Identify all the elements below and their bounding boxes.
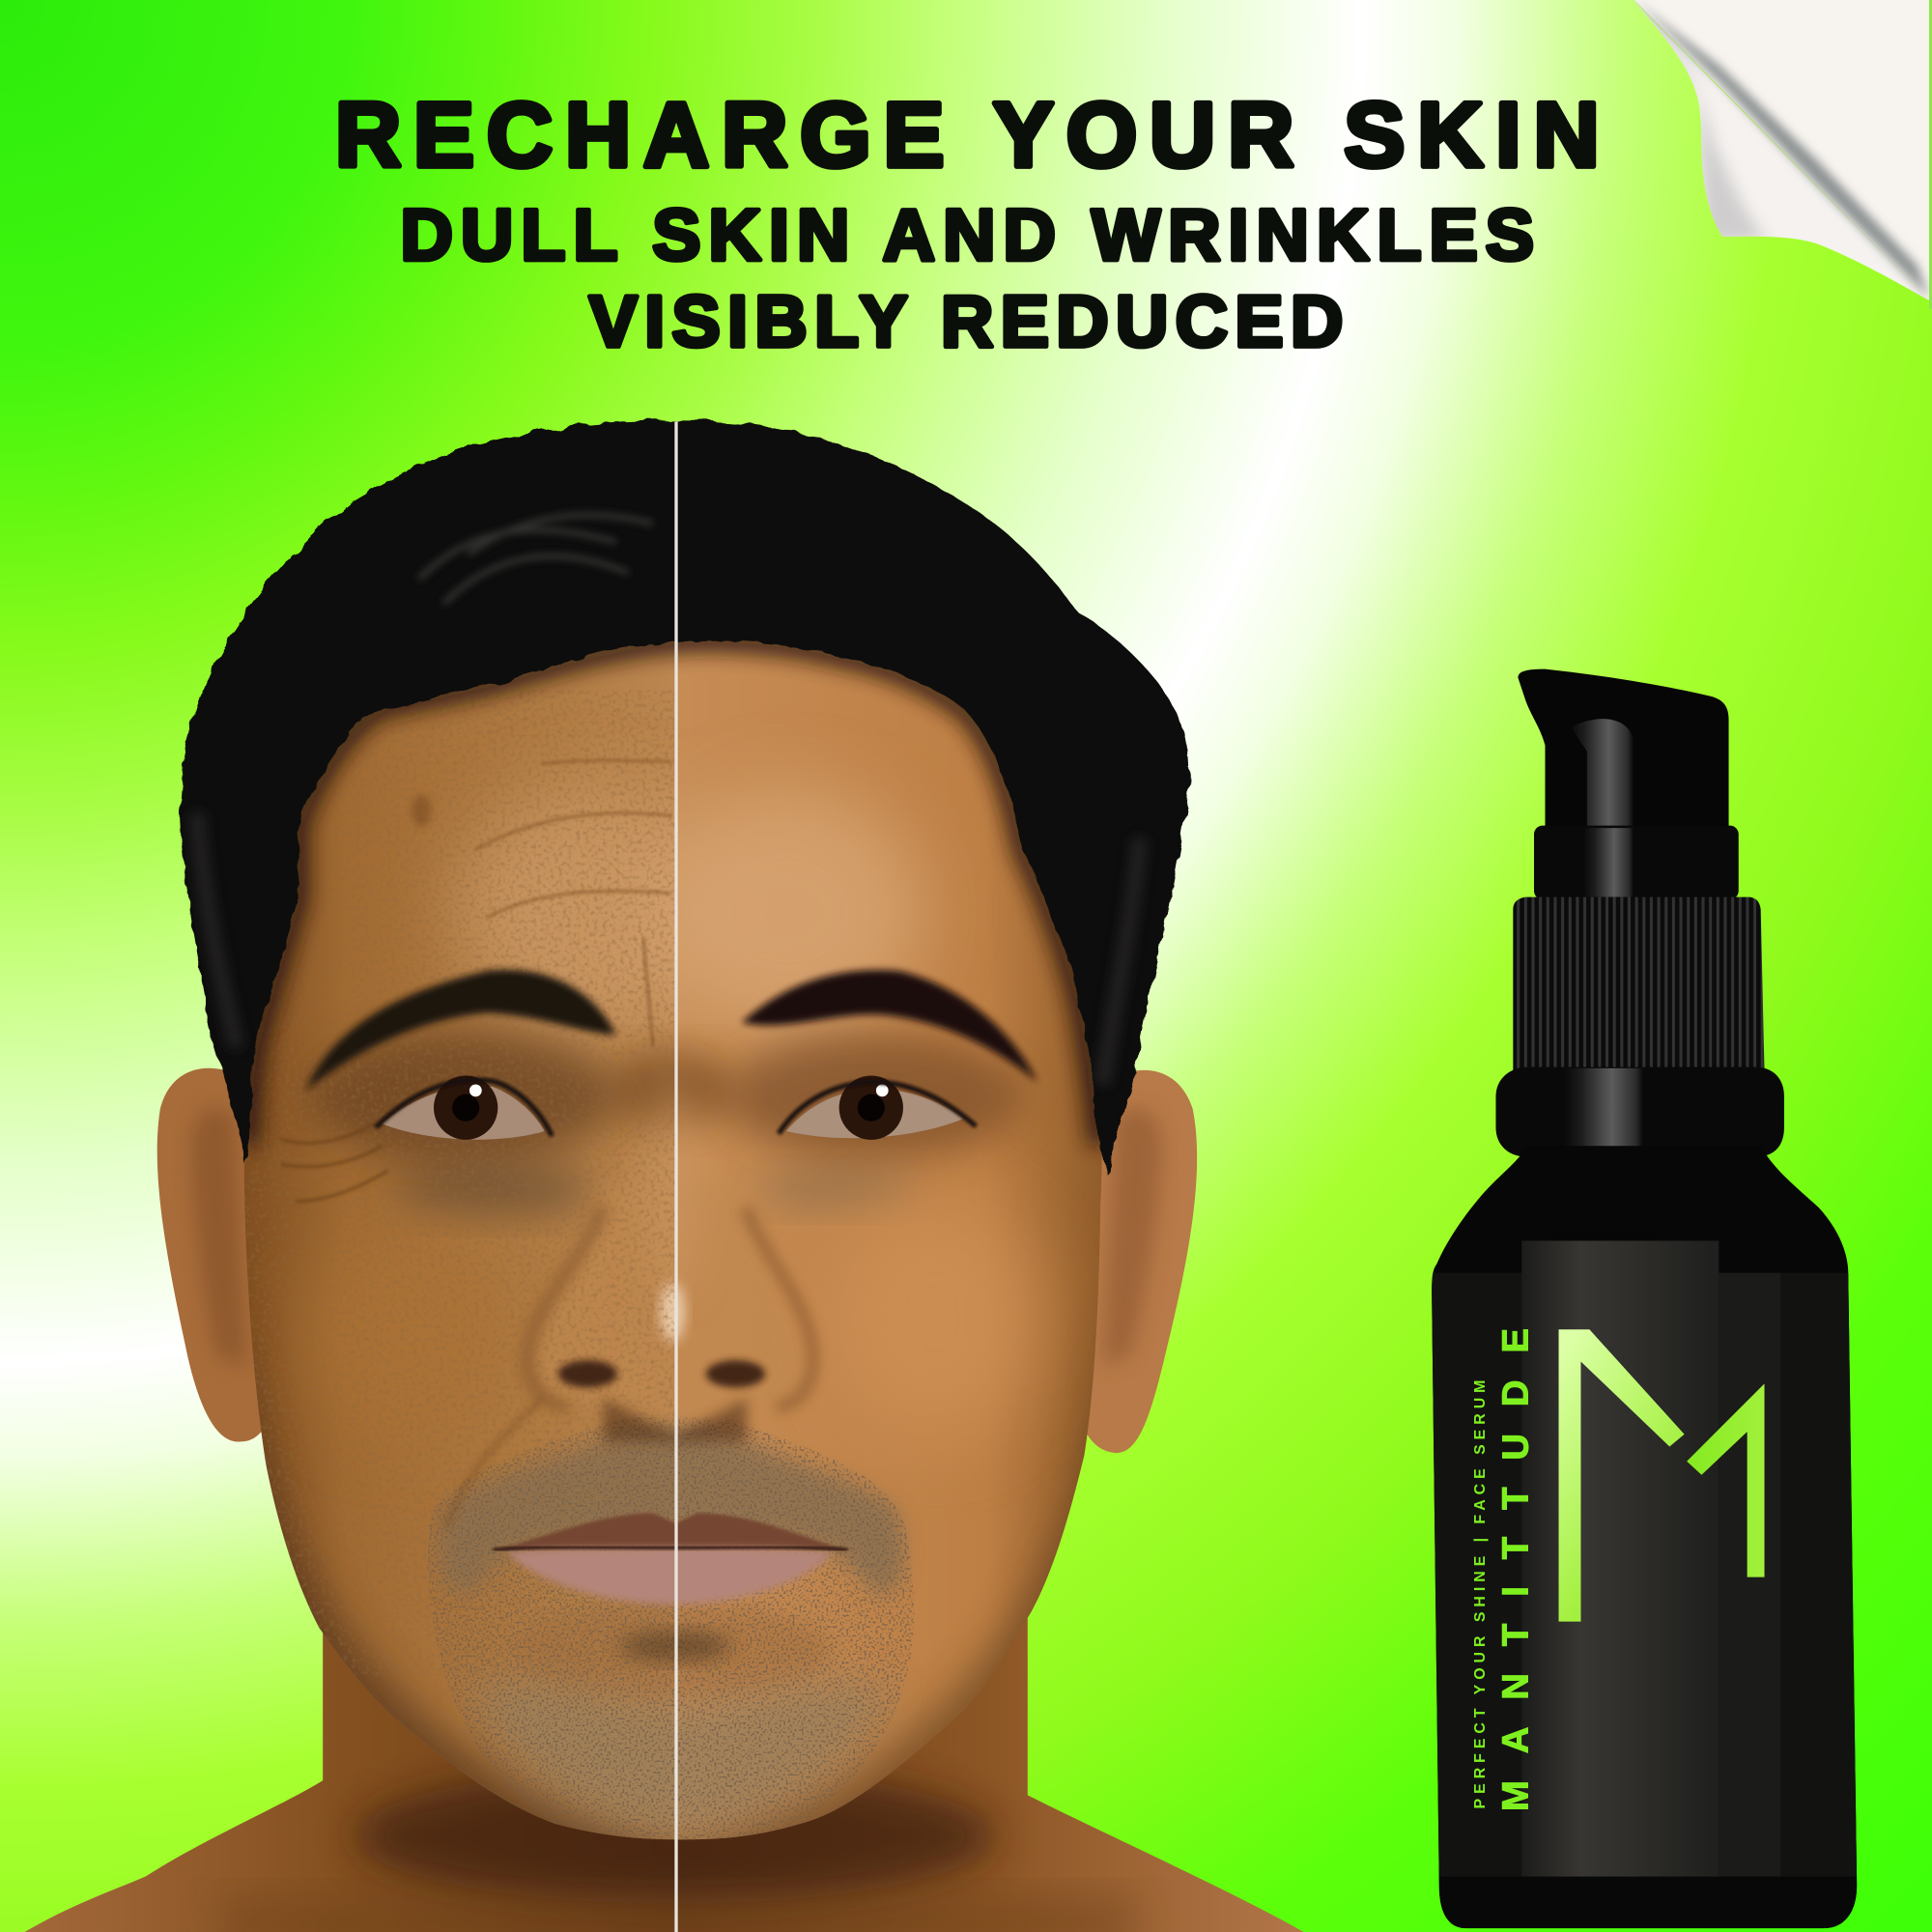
ribbed cap	[1513, 897, 1765, 1072]
cap flange	[1495, 1067, 1784, 1157]
hairline soft shadow	[249, 640, 1099, 1145]
face skin	[243, 639, 1102, 1839]
body label	[1430, 1240, 1861, 1932]
hair	[180, 420, 1189, 1175]
nose bridge	[645, 1072, 705, 1293]
person: split face before and after	[25, 420, 1303, 1932]
left cheek	[313, 1323, 334, 1351]
skin pores	[234, 690, 675, 1676]
M logo	[1559, 1329, 1765, 1622]
chin stubble	[469, 1683, 894, 1833]
bottle body	[1432, 1146, 1857, 1928]
left eye	[376, 1076, 552, 1140]
right ear	[1078, 1070, 1197, 1453]
brand name: MANTITTUDE	[1495, 1328, 1537, 1811]
hair sheen	[419, 515, 653, 604]
dark shade between the eyes	[610, 1054, 733, 1127]
left age spot	[412, 795, 431, 827]
jaw edge shading	[254, 1364, 682, 1839]
nasolabial fold	[446, 1399, 542, 1528]
serum bottle	[1430, 669, 1861, 1932]
left ear	[157, 1068, 277, 1441]
stubble grain	[419, 1417, 936, 1848]
forehead highlight	[456, 788, 727, 1035]
skin between lip and chin	[511, 1602, 832, 1700]
right eye	[779, 1076, 976, 1140]
page curl: top right corner	[1633, 0, 1932, 309]
fold shadow	[1634, 0, 1929, 298]
pump head	[1518, 669, 1729, 832]
nostrils and nose base	[558, 1360, 765, 1441]
crow's feet	[281, 1123, 388, 1202]
pump gloss	[1571, 719, 1634, 832]
nose	[533, 1182, 801, 1423]
right eyebrow	[742, 970, 1037, 1082]
soul patch	[620, 1632, 730, 1661]
nose highlight	[661, 1283, 685, 1342]
nose side shadows	[527, 1208, 813, 1407]
left eyebrow	[305, 970, 616, 1091]
forehead wrinkles	[474, 760, 671, 918]
split divider line	[674, 421, 678, 1932]
right cheek	[832, 1195, 1041, 1441]
moustache stubble	[440, 1423, 904, 1596]
temple grey strands	[197, 813, 1140, 1084]
collar	[1534, 826, 1739, 899]
subheading line 1: DULL SKIN AND WRINKLES	[401, 194, 1534, 275]
tagline: PERFECT YOUR SHINE | FACE SERUM	[1472, 1380, 1489, 1808]
flap shade	[1633, 0, 1768, 242]
neck and shoulders	[25, 1602, 1303, 1932]
heading: recharge your skin: RECHARGE YOUR SKIN	[335, 85, 1600, 186]
under-eye bags	[394, 1162, 591, 1216]
lips	[493, 1513, 848, 1605]
headline text	[335, 85, 1600, 361]
curled paper flap	[1633, 0, 1929, 300]
glabella crease	[643, 936, 653, 1047]
eye socket shading	[308, 1029, 616, 1164]
subheading line 2: VISIBLY REDUCED	[589, 280, 1343, 361]
cream corner sheet	[1634, 0, 1929, 300]
